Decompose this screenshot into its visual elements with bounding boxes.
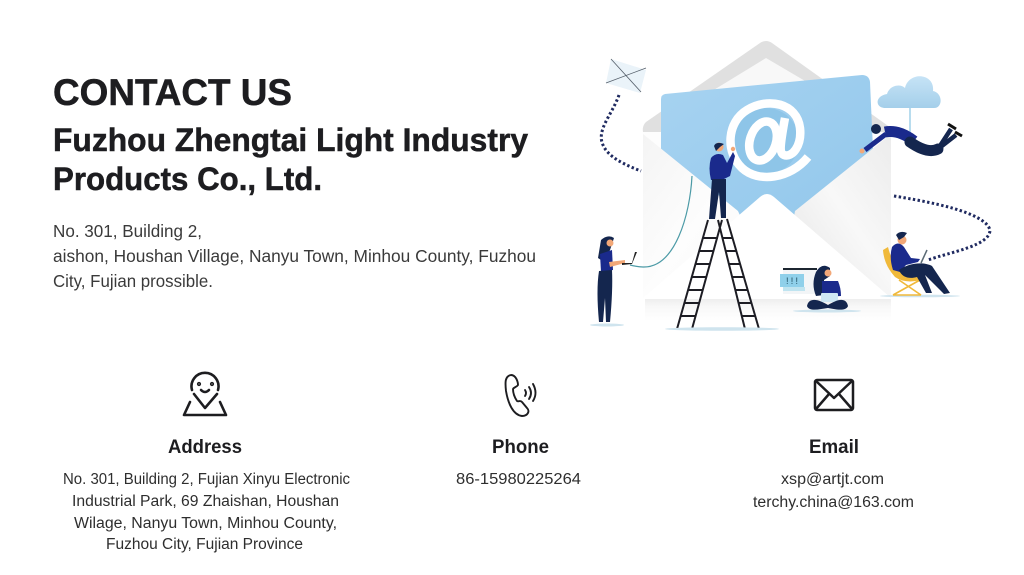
paper plane envelope — [606, 59, 646, 93]
company name heading: Fuzhou Zhengtai Light Industry — [53, 122, 528, 158]
phone column — [456, 436, 581, 488]
envelope left flap — [643, 134, 760, 298]
company name heading: Products Co., Ltd. — [53, 161, 322, 197]
address column: Wilage, Nanyu Town, Minhou County, — [74, 515, 337, 532]
address paragraph: City, Fujian prossible. — [53, 271, 213, 291]
address paragraph: No. 301, Building 2, — [53, 221, 202, 241]
phone column: 86-15980225264 — [456, 471, 581, 488]
address column: No. 301, Building 2, Fujian Xinyu Electronic — [63, 471, 350, 488]
envelope shadow — [645, 299, 891, 321]
illustration: email envelope scene — [590, 41, 990, 331]
seated man on chair — [880, 232, 960, 297]
screen panel — [780, 268, 817, 294]
email column: Email — [809, 436, 859, 458]
ladder — [677, 219, 759, 329]
address column: Industrial Park, 69 Zhaishan, Houshan — [72, 493, 339, 510]
screen panel: !!! — [786, 276, 798, 286]
company name heading — [53, 122, 528, 197]
cloud — [878, 76, 941, 133]
title: CONTACT US — [53, 72, 292, 113]
address column: Fuzhou City, Fujian Province — [106, 536, 303, 553]
envelope body — [643, 132, 891, 298]
envelope front flap — [643, 194, 891, 298]
address column: Address — [168, 436, 242, 458]
blue letter — [661, 75, 873, 230]
at symbol — [731, 103, 808, 177]
envelope back flap — [643, 41, 891, 150]
icon: map pin with smile — [184, 373, 226, 415]
woman with laptop — [590, 236, 637, 326]
person flying — [860, 124, 962, 154]
seated woman — [793, 266, 861, 312]
ladder floor shadow — [665, 327, 779, 331]
icon: envelope — [815, 380, 853, 410]
envelope right flap — [780, 134, 891, 298]
email column — [753, 436, 914, 511]
envelope back flap inner — [668, 58, 868, 118]
address column — [63, 436, 350, 553]
email column: xsp@artjt.com — [781, 471, 884, 488]
person on ladder — [709, 142, 735, 219]
email column: terchy.china@163.com — [753, 494, 914, 511]
dotted trail right — [894, 196, 990, 260]
icon: phone — [506, 375, 536, 416]
dotted trail left — [601, 95, 641, 171]
cable — [630, 176, 692, 267]
address paragraph — [53, 221, 536, 291]
address paragraph: aishon, Houshan Village, Nanyu Town, Minhou County, Fuzhou — [53, 246, 536, 266]
phone column: Phone — [492, 436, 549, 458]
